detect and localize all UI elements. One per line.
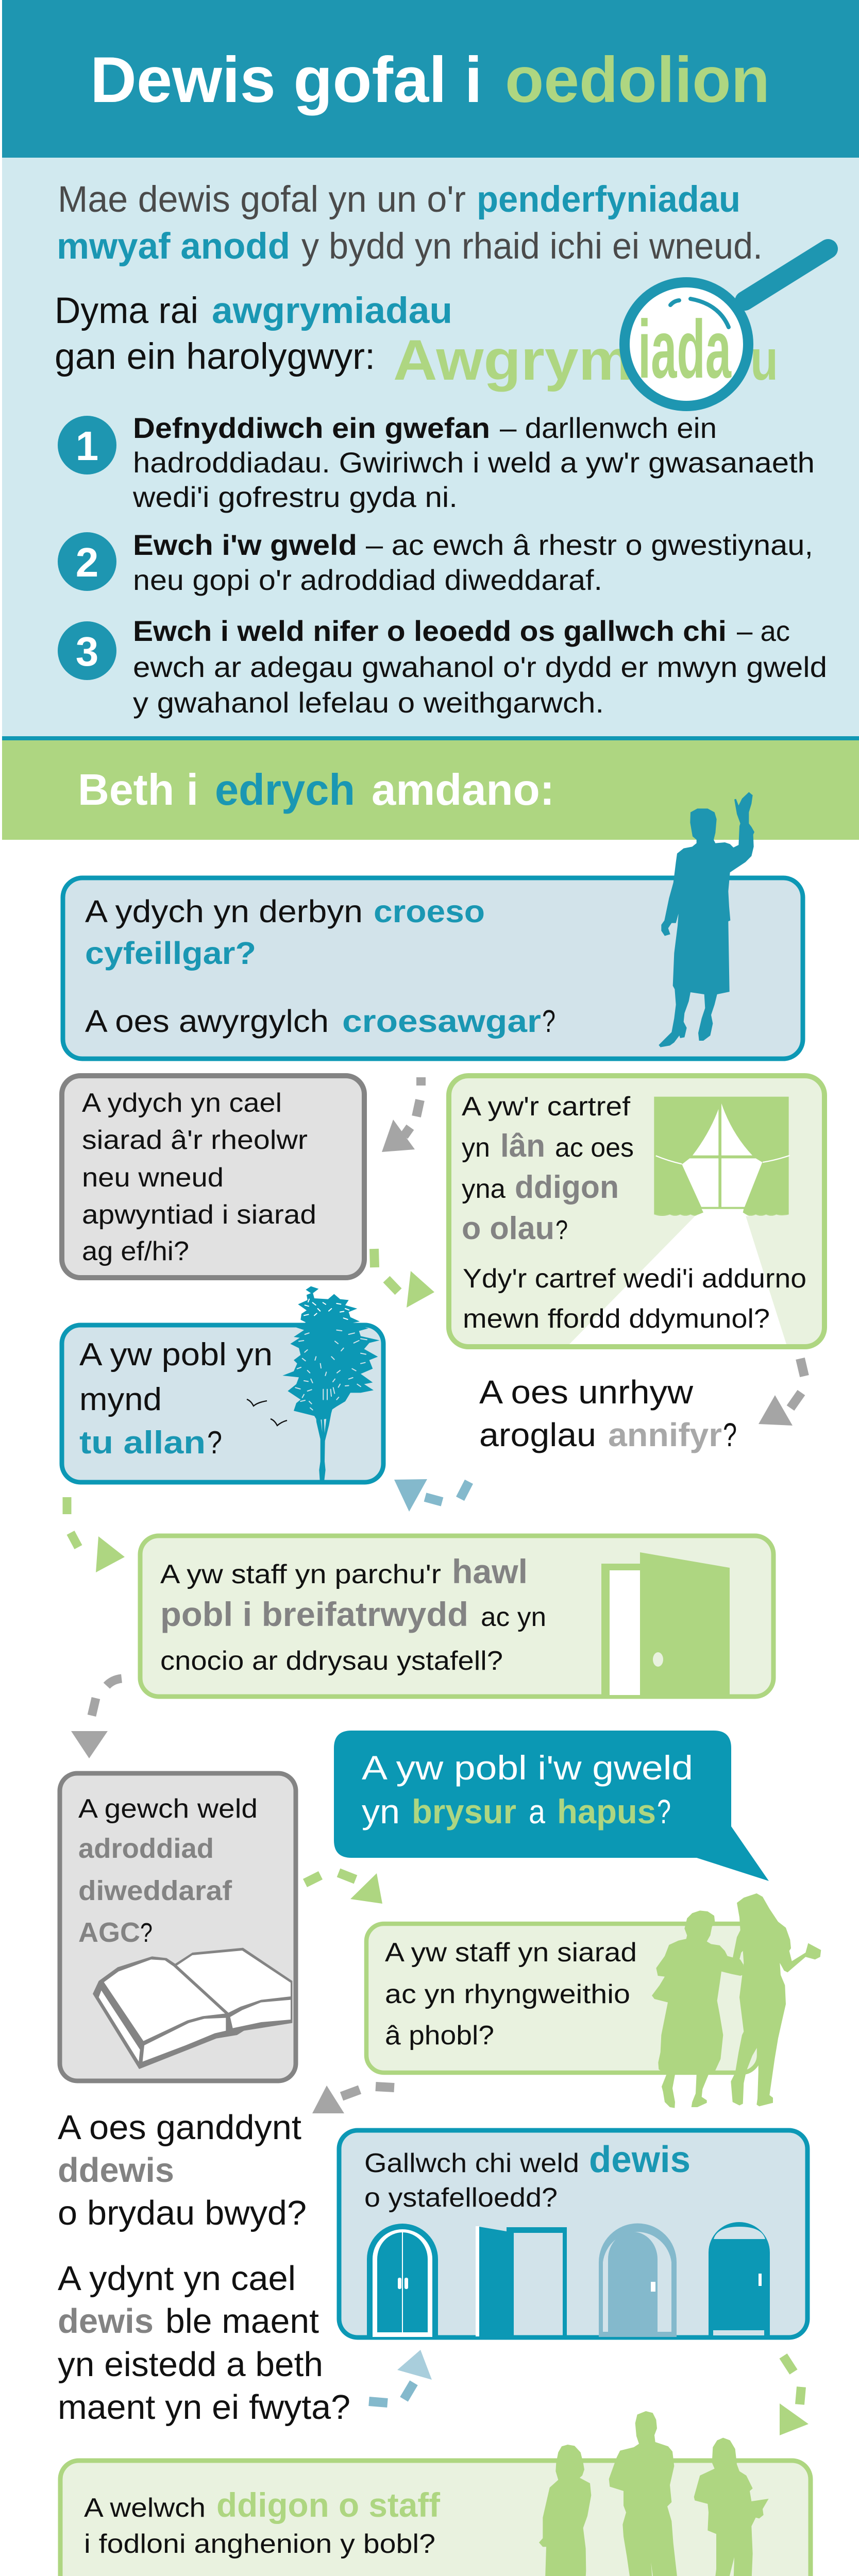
report text: ? xyxy=(140,1918,153,1948)
bubble text: yn xyxy=(362,1792,400,1831)
welcome text: cyfeillgar? xyxy=(85,936,256,971)
arrow: privacy to report xyxy=(71,1679,122,1758)
bubble text: hapus xyxy=(557,1792,656,1831)
tips subheading: Dyma rai xyxy=(55,291,198,331)
text: smells question: ? xyxy=(723,1416,737,1453)
report text: diweddaraf xyxy=(78,1875,232,1906)
number badge 2 xyxy=(58,532,116,591)
privacy text: hawl xyxy=(452,1552,528,1590)
icon: waving woman silhouette xyxy=(659,792,754,1047)
intro text: y bydd yn rhaid ichi ei wneud. xyxy=(301,226,763,267)
arrow: rooms to staffing xyxy=(780,2356,809,2435)
report text xyxy=(78,1794,258,1948)
clean and light text: ac oes xyxy=(555,1133,634,1163)
bubble text: ? xyxy=(657,1792,671,1831)
light beam xyxy=(569,1209,786,1344)
text: mealtime choice: ddewis xyxy=(58,2151,174,2190)
rooms text: Gallwch chi weld xyxy=(364,2148,579,2178)
text: smells question: A oes unrhyw xyxy=(479,1374,694,1411)
title: oedolion xyxy=(505,44,770,116)
tip 3: Ewch i weld nifer o leoedd os gallwch chi xyxy=(133,615,727,647)
icon: open door xyxy=(601,1552,730,1699)
welcome text: A ydych yn derbyn xyxy=(85,894,363,929)
manager text: A ydych yn cael xyxy=(82,1088,282,1118)
staffing text: ddigon o staff xyxy=(216,2486,441,2524)
report text: A gewch weld xyxy=(78,1794,258,1824)
privacy text xyxy=(160,1552,546,1676)
icon: magnifying glass over Awgrymiadau xyxy=(393,249,828,406)
outdoors text xyxy=(79,1337,273,1461)
privacy text: ac yn xyxy=(481,1602,546,1632)
panel: choice of rooms xyxy=(339,2130,807,2337)
tips subheading: awgrymiadau xyxy=(212,291,452,331)
clean and light text: yna xyxy=(462,1174,506,1204)
icon: two women silhouettes xyxy=(652,1893,821,2108)
welcome text: ? xyxy=(542,1004,555,1039)
panel: staff interaction xyxy=(366,1893,821,2108)
tip 1: hadroddiadau. Gwiriwch i weld a yw'r gwasanaeth xyxy=(133,446,815,479)
section heading: Beth i xyxy=(78,766,198,815)
clean and light text: A yw'r cartref xyxy=(462,1092,631,1122)
icon: magnifying glass over Awgrymiadau: Awgrym xyxy=(393,328,633,392)
privacy text: A yw staff yn parchu'r xyxy=(160,1560,441,1589)
panel: manager xyxy=(62,1076,364,1278)
text: mealtime choice: yn eistedd a beth xyxy=(58,2345,323,2384)
number badge 1 xyxy=(58,416,116,474)
icon: tree xyxy=(282,1286,380,1480)
intro text: Mae dewis gofal yn un o'r xyxy=(58,179,466,220)
privacy text: cnocio ar ddrysau ystafell? xyxy=(160,1646,503,1676)
tip 1: Defnyddiwch ein gwefan xyxy=(133,412,490,444)
icon: magnifying glass over Awgrymiadau: u xyxy=(750,328,778,392)
panel: report xyxy=(60,1773,296,2081)
arrow: clean and light to smells xyxy=(759,1359,804,1426)
interaction text: ac yn rhyngweithio xyxy=(385,1979,630,2009)
number badge 3 xyxy=(58,621,116,680)
text: mealtime choice: maent yn ei fwyta? xyxy=(58,2388,350,2427)
tip 1: wedi'i gofrestru gyda ni. xyxy=(132,481,458,513)
staffing text xyxy=(84,2486,441,2576)
arrow: report to interaction xyxy=(305,1873,382,1904)
tip 2: – ac ewch â rhestr o gwestiynau, xyxy=(366,529,813,561)
outdoors text: A yw pobl yn xyxy=(79,1337,273,1372)
welcome text: croesawgar xyxy=(342,1004,541,1039)
staffing text: i fodloni anghenion y bobl? xyxy=(84,2529,435,2559)
arrow: outdoors to privacy xyxy=(67,1497,125,1572)
clean and light text xyxy=(462,1092,806,1334)
tips subheading: gan ein harolygwyr: xyxy=(55,336,375,377)
icon: curtained window xyxy=(654,1097,790,1216)
welcome text: croeso xyxy=(374,894,485,929)
arrow: mealtimes to rooms xyxy=(369,2350,432,2403)
arrow: manager to clean and light xyxy=(374,1249,434,1308)
welcome text: A oes awyrgylch xyxy=(85,1004,329,1039)
panel: outdoors xyxy=(62,1286,383,1482)
bubble text xyxy=(362,1749,693,1831)
report text: AGC xyxy=(78,1917,140,1948)
report text: adroddiad xyxy=(78,1833,214,1864)
manager text: ag ef/hi? xyxy=(82,1236,189,1266)
panel: staffing xyxy=(60,2411,811,2576)
tip 3: ewch ar adegau gwahanol o'r dydd er mwyn gweld xyxy=(133,651,827,683)
clean and light text: lân xyxy=(500,1128,545,1164)
clean and light text: ? xyxy=(555,1215,568,1245)
speech bubble xyxy=(334,1731,769,1881)
tip 3 xyxy=(58,615,827,719)
tip 1: – darllenwch ein xyxy=(500,412,717,444)
text: mealtime choice: o brydau bwyd? xyxy=(58,2194,307,2232)
rooms text: o ystafelloedd? xyxy=(364,2183,558,2213)
text: smells question xyxy=(479,1374,737,1453)
number badge 2: 2 xyxy=(76,539,98,585)
bubble text: a xyxy=(529,1792,545,1831)
panel: welcome xyxy=(63,792,803,1059)
clean and light text: o olau xyxy=(462,1211,554,1246)
icon: door 4 xyxy=(709,2222,770,2337)
arrow: smells to outdoors xyxy=(394,1479,469,1512)
arrow: interaction to mealtimes xyxy=(312,2086,394,2113)
bubble text: A yw pobl i'w gweld xyxy=(362,1749,693,1787)
number badge 3: 3 xyxy=(76,629,98,674)
arrow: welcome to manager xyxy=(382,1077,421,1152)
privacy text: pobl i breifatrwydd xyxy=(160,1595,468,1633)
rooms text: dewis xyxy=(589,2139,690,2180)
tip 3: y gwahanol lefelau o weithgarwch. xyxy=(133,686,604,719)
rooms text xyxy=(364,2139,690,2213)
clean and light text: mewn ffordd ddymunol? xyxy=(463,1304,770,1334)
tip 1 xyxy=(58,412,815,513)
welcome text xyxy=(85,894,555,1039)
interaction text: A yw staff yn siarad xyxy=(385,1938,637,1968)
intro text: penderfyniadau xyxy=(477,179,740,220)
text: smells question: annifyr xyxy=(608,1416,722,1453)
section heading: amdano: xyxy=(372,766,554,815)
text: smells question: aroglau xyxy=(479,1416,596,1453)
tip 2: neu gopi o'r adroddiad diweddaraf. xyxy=(133,564,602,596)
manager text: neu wneud xyxy=(82,1163,224,1193)
clean and light text: yn xyxy=(462,1133,490,1163)
interaction text xyxy=(385,1938,637,2050)
bubble text: brysur xyxy=(412,1792,516,1831)
interaction text: â phobl? xyxy=(385,2021,494,2050)
text: mealtime choice xyxy=(58,2108,350,2427)
text: mealtime choice: A oes ganddynt xyxy=(58,2108,301,2147)
manager text: apwyntiad i siarad xyxy=(82,1200,316,1230)
tip 2: Ewch i'w gweld xyxy=(133,529,357,561)
clean and light text: ddigon xyxy=(515,1170,619,1205)
header banner xyxy=(2,0,859,158)
tip 3: – ac xyxy=(737,615,790,647)
intro text: mwyaf anodd xyxy=(57,226,290,267)
panel: clean and light xyxy=(449,1076,824,1347)
tips subheading xyxy=(55,291,452,377)
outdoors text: tu allan xyxy=(79,1425,206,1461)
section heading band xyxy=(2,740,859,840)
panel: privacy xyxy=(140,1536,773,1699)
text: mealtime choice: ble maent xyxy=(165,2302,319,2341)
panel: tips xyxy=(2,158,859,740)
icon: open book xyxy=(93,1948,292,2069)
staffing text: A welwch xyxy=(84,2493,206,2523)
icon: door 3 xyxy=(599,2224,677,2337)
icon: three staff silhouettes xyxy=(539,2411,769,2576)
outdoors text: mynd xyxy=(79,1382,162,1417)
tip 2 xyxy=(58,529,813,596)
section heading: edrych xyxy=(215,766,355,815)
manager text: siarad â'r rheolwr xyxy=(82,1125,308,1155)
manager text xyxy=(82,1088,316,1266)
text: mealtime choice: A ydynt yn cael xyxy=(58,2259,296,2298)
icon: magnifying glass over Awgrymiadau: iada xyxy=(638,303,732,395)
intro text xyxy=(57,179,763,267)
icon: birds xyxy=(247,1399,287,1426)
text: mealtime choice: dewis xyxy=(58,2302,154,2341)
clean and light text: Ydy'r cartref wedi'i addurno xyxy=(463,1264,806,1294)
icon: door 2 xyxy=(476,2226,567,2336)
number badge 1: 1 xyxy=(76,423,98,469)
title: Dewis gofal i xyxy=(90,44,482,116)
section heading xyxy=(78,766,554,815)
outdoors text: ? xyxy=(207,1425,222,1461)
icon: door 1 xyxy=(367,2224,438,2337)
title xyxy=(90,44,770,116)
